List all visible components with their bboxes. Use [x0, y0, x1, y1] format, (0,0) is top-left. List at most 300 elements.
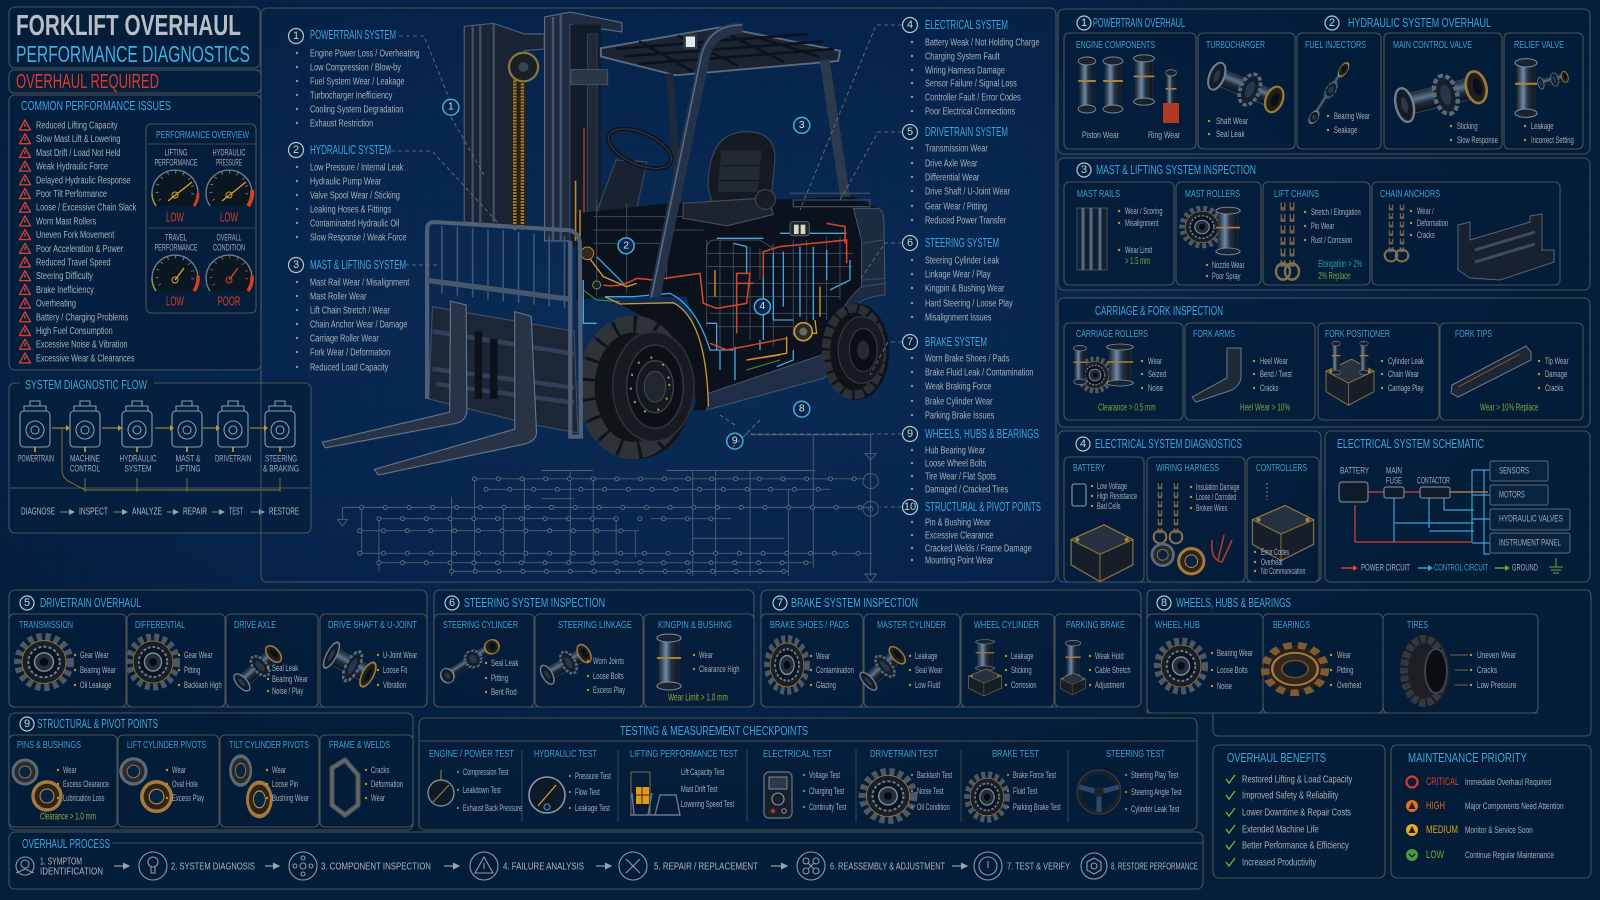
- component labels: Tip Wear: [1545, 356, 1569, 366]
- panel: powertrain and hydraulic overhaul: MAIN CONTROL VALVE: [1393, 39, 1472, 51]
- component labels: Stretch / Elongation: [1311, 207, 1361, 217]
- panel: brake system inspection: PARKING BRAKE: [1066, 619, 1125, 631]
- component labels: Oil Leakage: [80, 680, 112, 690]
- panel: performance overview gauges: PERFORMANCE OVERVIEW: [156, 129, 249, 141]
- block: mast and lifting list: Fork Wear / Deformation: [310, 346, 390, 358]
- component labels: [486, 650, 740, 703]
- component labels: Bearing Wear: [80, 665, 116, 675]
- test labels: Oil Condition: [917, 802, 950, 812]
- block: structural and pivot points list: [902, 500, 1041, 566]
- component labels: Seized: [1148, 369, 1166, 379]
- callouts on machine: 4: [759, 301, 766, 312]
- block: hydraulic system list: [288, 142, 407, 243]
- panel: wheels, hubs and bearings: WHEEL HUB: [1155, 619, 1200, 631]
- panel: carriage and fork inspection: FORK POSITIONER: [1325, 328, 1390, 340]
- component labels: Deformation: [371, 779, 403, 789]
- callouts on machine: 9: [732, 436, 738, 447]
- component labels: [40, 765, 403, 822]
- test labels: Charging Test: [809, 786, 845, 796]
- component labels: Loose Bolts: [1217, 665, 1248, 675]
- panel: powertrain and hydraulic overhaul: [1058, 9, 1590, 154]
- test labels: Steering Angle Test: [1131, 787, 1182, 797]
- flow labels: LIFTING: [176, 464, 200, 474]
- schematic components: BATTERY: [1340, 466, 1369, 476]
- component labels: Excess Clearance: [63, 779, 109, 789]
- step arrows: [114, 865, 967, 867]
- schematic components: [1339, 461, 1570, 553]
- panel: steering system inspection: STEERING SYSTEM INSPECTION: [464, 596, 605, 610]
- component labels: Wear Limit > 1.0 mm: [668, 691, 728, 703]
- panel: steering system inspection: KINGPIN & BUSHING: [658, 619, 732, 631]
- priority levels: [1426, 776, 1459, 861]
- list: performance issues: Excessive Wear & Clearances: [36, 352, 135, 364]
- component labels: Cracks: [1545, 383, 1563, 393]
- panel: wheels, hubs and bearings: 8: [1161, 597, 1167, 609]
- test equipment images: [428, 770, 1121, 820]
- block: structural and pivot points list: STRUCTURAL & PIVOT POINTS: [925, 500, 1041, 514]
- step labels: 1. SYMPTOM: [40, 856, 82, 868]
- list: performance issues: Battery / Charging Problems: [36, 311, 129, 323]
- panel: electrical system diagnostics: [1058, 431, 1321, 589]
- block: hydraulic system list: Slow Response / Weak Force: [310, 231, 407, 243]
- flow labels: CONTROL: [70, 464, 100, 474]
- component labels: Wear: [371, 793, 385, 803]
- component labels: Seal Leak: [1216, 129, 1245, 139]
- panel: mast and lifting system inspection: MAST RAILS: [1077, 188, 1120, 200]
- panel: powertrain and hydraulic overhaul: POWERTRAIN OVERHAUL: [1093, 16, 1185, 30]
- carriage: [427, 222, 581, 437]
- test labels: Leakage Test: [575, 803, 610, 813]
- panel: carriage and fork inspection: CARRIAGE & FORK INSPECTION: [1095, 304, 1223, 318]
- block: mast and lifting list: [288, 258, 410, 373]
- component labels: Wear > 10% Replace: [1480, 401, 1539, 413]
- benefits list: Extended Machine Life: [1242, 823, 1319, 835]
- list: performance issues: High Fuel Consumption: [36, 325, 113, 336]
- step labels: 3. COMPONENT INSPECTION: [321, 862, 431, 872]
- panel: structural and pivot points: TILT CYLINDER PIVOTS: [229, 739, 309, 751]
- block: steering system list: Hard Steering / Loose Play: [925, 297, 1013, 309]
- test labels: Brake Force Test: [1013, 770, 1057, 780]
- process chain: ANALYZE: [132, 506, 162, 518]
- component labels: Gear Wear: [80, 650, 109, 660]
- component labels: [1092, 480, 1305, 577]
- schematic components: SENSORS: [1499, 466, 1529, 476]
- component images: carriage: [1073, 341, 1531, 405]
- component labels: Loose / Corroded: [1196, 491, 1236, 503]
- schematic legend: [1341, 558, 1563, 574]
- panel: common performance issues: [9, 95, 261, 370]
- component labels: Weak Hold: [1095, 651, 1124, 661]
- process chain: REPAIR: [183, 506, 207, 518]
- rear wheel: [824, 303, 889, 400]
- block: powertrain system list: 1: [293, 30, 299, 42]
- component labels: Cracks: [1260, 383, 1278, 393]
- panel: maintenance priority: MAINTENANCE PRIORITY: [1408, 751, 1528, 765]
- component labels: Gear Wear: [184, 650, 213, 660]
- side skirt: [707, 353, 832, 410]
- component labels: Wear Limit: [1125, 245, 1153, 255]
- gauge: overall condition: [206, 232, 252, 308]
- block: mast and lifting list: MAST & LIFTING SYSTEM: [310, 258, 406, 272]
- process chain: INSPECT: [79, 506, 108, 518]
- test labels: Exhaust Back Pressure: [463, 803, 522, 813]
- subtitle: PERFORMANCE DIAGNOSTICS: [16, 41, 250, 67]
- component labels: Poor Spray: [1212, 271, 1241, 281]
- component labels: Bend / Twist: [1260, 369, 1293, 379]
- gauge: lifting performance: LIFTING: [164, 148, 188, 158]
- component labels: [75, 650, 417, 696]
- list: performance issues: Steering Difficulty: [36, 270, 93, 281]
- panel: powertrain and hydraulic overhaul: ENGINE COMPONENTS: [1076, 39, 1155, 51]
- component labels: High Resistance: [1097, 490, 1137, 502]
- wheel arch: [620, 304, 708, 411]
- gauge: travel performance: TRAVEL: [165, 232, 187, 244]
- callouts on machine: 1: [448, 102, 454, 113]
- process chain: TEST: [229, 506, 243, 518]
- component labels: Bearing Wear: [1217, 648, 1253, 658]
- flow labels: DRIVETRAIN: [215, 454, 251, 464]
- block: powertrain system list: Fuel System Wear / Leakage: [310, 75, 404, 87]
- panel: structural and pivot points: PINS & BUSHINGS: [17, 739, 81, 751]
- gauge: travel performance: PERFORMANCE: [154, 242, 198, 254]
- block: powertrain system list: POWERTRAIN SYSTEM: [310, 28, 396, 42]
- callouts on machine: 2: [623, 240, 629, 251]
- panel: drivetrain overhaul: TRANSMISSION: [19, 619, 73, 631]
- panel: carriage and fork inspection: FORK TIPS: [1455, 328, 1492, 340]
- component labels: Pitting: [184, 665, 200, 675]
- step labels: 2. SYSTEM DIAGNOSIS: [171, 862, 255, 872]
- gauge: travel performance: [152, 232, 198, 308]
- overhead guard: [601, 27, 850, 233]
- component labels: Bearing Wear: [1334, 111, 1370, 121]
- test labels: [458, 767, 1182, 814]
- panel: powertrain and hydraulic overhaul: TURBOCHARGER: [1206, 39, 1265, 51]
- panel: overhaul benefits: OVERHAUL BENEFITS: [1227, 751, 1326, 765]
- block: wheels hubs bearings list: Loose Wheel Bolts: [925, 457, 987, 469]
- schematic legend: CONTROL CIRCUIT: [1434, 562, 1488, 574]
- flow labels: HYDRAULIC: [120, 454, 157, 464]
- panel: drivetrain overhaul: 5: [24, 597, 30, 609]
- component labels: Elongation > 2%: [1318, 259, 1362, 269]
- green wires: [583, 290, 780, 370]
- component labels: Error Codes: [1261, 546, 1289, 558]
- block: drivetrain system list: Reduced Power Transfer: [925, 214, 1006, 226]
- block: drivetrain system list: Gear Wear / Pitting: [925, 200, 987, 212]
- panel: drivetrain overhaul: DIFFERENTIAL: [135, 619, 185, 631]
- block: mast and lifting list: Carriage Roller Wear: [310, 332, 379, 344]
- panel: steering system inspection: [434, 590, 754, 707]
- component labels: Cylinder Leak: [1388, 356, 1424, 366]
- component labels: Noise: [1217, 681, 1232, 691]
- benefits list: [1242, 773, 1353, 868]
- panel: drivetrain overhaul: DRIVETRAIN OVERHAUL: [40, 596, 141, 610]
- component labels: Uneven Wear: [1477, 650, 1517, 660]
- component labels: Low Pressure: [1477, 680, 1517, 690]
- panel: wheels, hubs and bearings: BEARINGS: [1273, 619, 1310, 631]
- panel: wheels, hubs and bearings: [1147, 590, 1591, 736]
- panel: brake system inspection: WHEEL CYLINDER: [974, 619, 1039, 631]
- component images: mast: [1077, 202, 1554, 280]
- list: performance issues: Poor Tilt Performance: [36, 188, 107, 199]
- block: wheels hubs bearings list: Hub Bearing Wear: [925, 444, 985, 456]
- benefits list: Better Performance & Efficiency: [1242, 839, 1349, 851]
- component labels: Bent Rod: [491, 687, 517, 697]
- component labels: Seakage: [1334, 125, 1358, 135]
- machine body and wiring: [577, 193, 889, 459]
- panel: testing and measurement checkpoints: STEERING TEST: [1106, 748, 1165, 760]
- forks: [322, 301, 537, 475]
- test labels: Flow Test: [575, 787, 600, 797]
- red wires: [603, 223, 847, 360]
- block: structural and pivot points list: Excessive Clearance: [925, 529, 994, 541]
- flow labels: [18, 454, 299, 474]
- component labels: Wear: [1148, 356, 1162, 366]
- component labels: Shaft Wear: [1216, 116, 1248, 126]
- block: powertrain system list: Engine Power Loss / Overheating: [310, 47, 419, 59]
- block: steering system list: Linkage Wear / Play: [925, 268, 991, 280]
- component labels: Clearance > 0.5 mm: [1098, 401, 1156, 413]
- schematic legend: POWER CIRCUIT: [1361, 562, 1410, 574]
- component labels: Bushing Wear: [272, 793, 309, 803]
- panel: mast and lifting system inspection: [1058, 158, 1590, 290]
- icons: warning triangles: [20, 120, 30, 363]
- block: structural and pivot points list: Mounting Point Wear: [925, 554, 993, 566]
- component labels: Wear: [1337, 650, 1351, 660]
- component labels: Vibration: [383, 680, 406, 690]
- component labels: [1119, 206, 1448, 281]
- component labels: [1098, 356, 1569, 413]
- priority descriptions: Continue Regular Maintenance: [1465, 850, 1554, 860]
- panel: structural and pivot points: STRUCTURAL & PIVOT POINTS: [37, 717, 158, 731]
- panel: testing and measurement checkpoints: HYDRAULIC TEST: [534, 748, 597, 760]
- benefits list: Lower Downtime & Repair Costs: [1242, 806, 1351, 818]
- component labels: Pin Wear: [1311, 221, 1335, 231]
- panel: structural and pivot points: [9, 713, 413, 830]
- test labels: Backlash Test: [917, 770, 953, 780]
- component labels: Loose Pin: [272, 779, 298, 789]
- block: wheels hubs bearings list: Damaged / Cracked Tires: [925, 483, 1009, 495]
- component labels: Clearance High: [699, 664, 740, 674]
- block: steering system list: 6: [907, 237, 913, 249]
- test labels: Lift Capacity Test: [681, 767, 725, 777]
- block: brake system list: Weak Braking Force: [925, 380, 991, 392]
- component images: electrical: [1071, 483, 1314, 589]
- block: brake system list: Parking Brake Issues: [925, 409, 995, 421]
- test labels: Parking Brake Test: [1013, 802, 1061, 812]
- block: wheels hubs bearings list: 9: [907, 428, 913, 440]
- block: electrical system list: Charging System Fault: [925, 50, 1000, 62]
- flow labels: MAST &: [176, 454, 201, 464]
- list: performance issues: Uneven Fork Movement: [36, 229, 115, 240]
- block: steering system list: Steering Cylinder Leak: [925, 254, 1000, 266]
- benefits list: Increased Productivity: [1242, 856, 1317, 868]
- front wheel: [581, 316, 694, 459]
- list: performance issues: Overheating: [36, 297, 76, 309]
- block: drivetrain system list: Differential Wear: [925, 171, 979, 183]
- component labels: Heel Wear > 10%: [1240, 401, 1291, 413]
- component labels: Cracks: [1477, 665, 1497, 675]
- panel: structural and pivot points: FRAME & WELDS: [329, 739, 390, 751]
- schematic components: CONTACTOR: [1417, 476, 1450, 486]
- component labels: Loose Bolts: [593, 671, 624, 681]
- schematic components: MOTORS: [1499, 490, 1525, 500]
- block: brake system list: Brake Cylinder Wear: [925, 395, 993, 407]
- panel: steering system inspection: 6: [449, 597, 455, 609]
- component labels: Slow Response: [1457, 135, 1498, 145]
- mast: [464, 12, 622, 247]
- test labels: Mast Drift Test: [681, 784, 718, 794]
- block: drivetrain system list: Drive Shaft / U-Joint Wear: [925, 185, 1010, 197]
- block: hydraulic system list: Hydraulic Pump Wear: [310, 175, 381, 187]
- block: hydraulic system list: Low Pressure / Internal Leak: [310, 161, 404, 173]
- panel: system diagnostic flow: [9, 376, 311, 533]
- orange wires: [580, 210, 820, 360]
- list: performance issues: [36, 119, 137, 364]
- flow labels: STEERING: [265, 454, 297, 464]
- component labels: Wear: [172, 765, 186, 775]
- block: drivetrain system list: Transmission Wear: [925, 142, 988, 154]
- panel: electrical system diagnostics: WIRING HARNESS: [1156, 462, 1219, 474]
- panel: carriage and fork inspection: [1058, 298, 1590, 427]
- component labels: Deformation: [1417, 218, 1448, 228]
- component labels: Wear: [699, 650, 713, 660]
- block: steering system list: Kingpin & Bushing Wear: [925, 282, 1004, 294]
- block: steering system list: [902, 236, 1013, 323]
- leader lines: [391, 25, 902, 507]
- block: powertrain system list: Cooling System Degradation: [310, 103, 403, 115]
- test labels: Compression Test: [463, 767, 509, 777]
- process chain: DIAGNOSE: [21, 506, 55, 518]
- priority levels: CRITICAL: [1426, 776, 1459, 788]
- component labels: Low Fluid: [915, 680, 940, 690]
- component labels: Seal Wear: [915, 665, 943, 675]
- block: powertrain system list: [288, 28, 419, 129]
- block: brake system list: BRAKE SYSTEM: [925, 335, 987, 349]
- gauge: overall condition: CONDITION: [213, 242, 245, 254]
- component images: drivetrain: [18, 636, 380, 695]
- component labels: Clearance > 1.0 mm: [40, 810, 96, 822]
- component labels: Excess Play: [593, 685, 625, 695]
- schematic components: HYDRAULIC VALVES: [1499, 514, 1563, 524]
- component labels: Ring Wear: [1148, 130, 1180, 140]
- block: steering system list: Misalignment Issues: [925, 311, 992, 323]
- callouts on machine: [443, 99, 810, 449]
- gauge: lifting performance: PERFORMANCE: [154, 158, 198, 168]
- cab light: [790, 222, 809, 236]
- panel: electrical system schematic: ELECTRICAL SYSTEM SCHEMATIC: [1337, 437, 1484, 451]
- check marks: [1226, 775, 1235, 866]
- priority descriptions: Monitor & Service Soon: [1465, 825, 1533, 835]
- panel: powertrain and hydraulic overhaul: 2: [1329, 17, 1335, 29]
- priority descriptions: [1465, 777, 1564, 860]
- heading: overhaul process: OVERHAUL PROCESS: [22, 837, 110, 851]
- component labels: [811, 651, 1131, 690]
- component labels: Wear / Scoring: [1125, 206, 1163, 216]
- benefits list: Restored Lifting & Load Capacity: [1242, 773, 1353, 785]
- block: hydraulic system list: 2: [293, 144, 299, 156]
- seat: [683, 132, 775, 226]
- test labels: Lowering Speed Test: [681, 799, 735, 809]
- component labels: Wear: [816, 651, 830, 661]
- panel: carriage and fork inspection: CARRIAGE ROLLERS: [1076, 328, 1148, 340]
- component labels: Wear: [272, 765, 286, 775]
- list: performance issues: Reduced Lifting Capacity: [36, 119, 118, 131]
- block: hydraulic system list: Valve Spool Wear / Sticking: [310, 189, 400, 201]
- block: mast and lifting list: Lift Chain Stretch / Wear: [310, 304, 390, 316]
- block: electrical system list: Sensor Failure / Signal Loss: [925, 77, 1017, 89]
- panel: electrical system diagnostics: 4: [1080, 438, 1086, 450]
- panel: testing and measurement checkpoints: DRIVETRAIN TEST: [870, 748, 938, 760]
- forklift illustration: [322, 12, 889, 582]
- panel: mast and lifting system inspection: 3: [1081, 164, 1087, 176]
- block: electrical system list: Wiring Harness Damage: [925, 64, 1005, 76]
- list: performance issues: Reduced Travel Speed: [36, 256, 111, 268]
- step labels: 7. TEST & VERIFY: [1007, 862, 1070, 872]
- block: mast and lifting list: Reduced Load Capacity: [310, 361, 389, 373]
- process chain: [21, 506, 299, 518]
- blue wires: [583, 233, 850, 380]
- component labels: Leakage: [1011, 651, 1034, 661]
- panel: structural and pivot points: LIFT CYLINDER PIVOTS: [127, 739, 206, 751]
- panel: testing and measurement checkpoints: ELECTRICAL TEST: [763, 748, 832, 760]
- panel: brake system inspection: 7: [777, 597, 783, 609]
- list: performance issues: Slow Mast Lift & Lowering: [36, 133, 120, 144]
- steering wheel: [597, 121, 677, 215]
- gauge: hydraulic pressure: HYDRAULIC: [212, 148, 246, 158]
- component images: powertrain and hydraulic: [1078, 55, 1570, 126]
- panel: brake system inspection: MASTER CYLINDER: [877, 619, 946, 631]
- flow labels: POWERTRAIN: [18, 454, 54, 464]
- panel: electrical system schematic: [1325, 431, 1590, 582]
- component labels: Piston Wear: [1082, 130, 1119, 140]
- block: drivetrain system list: 5: [907, 126, 913, 138]
- counterweight: [853, 208, 885, 295]
- panel: overhaul required banner: OVERHAUL REQUIRED: [16, 71, 159, 93]
- panel: testing and measurement checkpoints: LIFTING PERFORMANCE TEST: [630, 748, 738, 760]
- component labels: Leakage: [1531, 121, 1554, 131]
- step labels: 6. REASSEMBLY & ADJUSTMENT: [830, 862, 945, 872]
- component labels: Sticking: [1011, 665, 1032, 675]
- test labels: Fluid Test: [1013, 786, 1038, 796]
- schematic wiring: [1355, 470, 1490, 554]
- test labels: Cylinder Leak Test: [1131, 804, 1180, 814]
- component images: brake: [767, 639, 1086, 696]
- list: performance issues: Worn Mast Rollers: [36, 215, 97, 227]
- schematic components: FUSE: [1386, 476, 1402, 486]
- block: electrical system list: 4: [907, 19, 913, 31]
- panel: carriage and fork inspection: FORK ARMS: [1193, 328, 1235, 340]
- flow icons: [20, 401, 295, 492]
- component labels: [1082, 111, 1574, 145]
- block: mast and lifting list: Chain Anchor Wear / Damage: [310, 318, 407, 330]
- component labels: Loose Fit: [383, 665, 408, 675]
- panel: steering system inspection: STEERING CYLINDER: [443, 619, 518, 631]
- component labels: Sticking: [1457, 121, 1478, 131]
- step labels: [40, 856, 1198, 878]
- block: steering system list: STEERING SYSTEM: [925, 236, 999, 250]
- gauge: hydraulic pressure: [206, 148, 252, 224]
- process chain: RESTORE: [269, 506, 299, 518]
- component labels: Cracks: [371, 765, 389, 775]
- schematic components: MAIN: [1386, 466, 1402, 476]
- panel: testing and measurement checkpoints: TESTING & MEASUREMENT CHECKPOINTS: [620, 724, 808, 738]
- gauge: lifting performance: [152, 148, 198, 224]
- component labels: No Communication: [1261, 565, 1305, 577]
- gauge: overall condition: POOR: [218, 294, 240, 308]
- panel: electrical system diagnostics: CONTROLLERS: [1256, 462, 1307, 474]
- panel: powertrain and hydraulic overhaul: RELIEF VALVE: [1514, 39, 1564, 51]
- panel: wheels, hubs and bearings: TIRES: [1407, 619, 1428, 631]
